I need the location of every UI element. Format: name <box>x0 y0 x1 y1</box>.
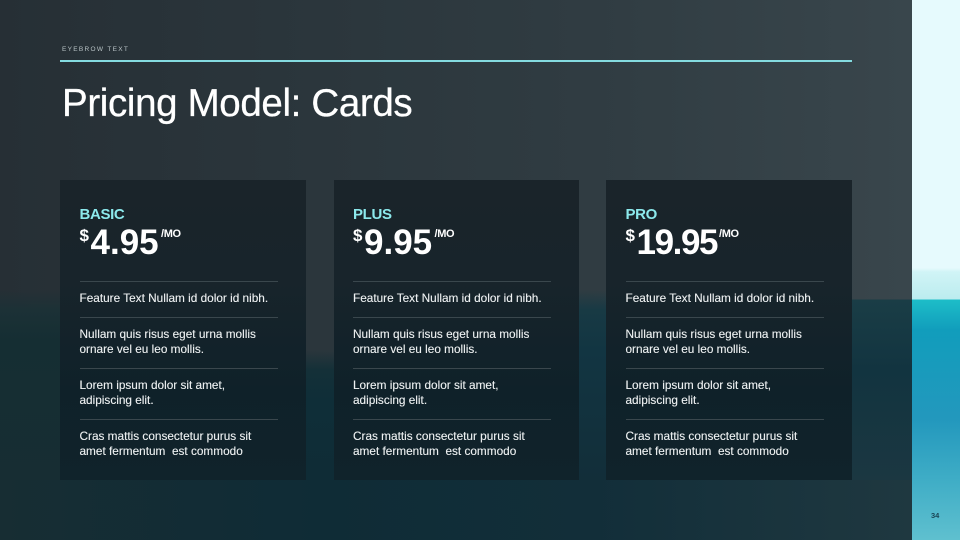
feature 4: Cras mattis consectetur purus sit <box>353 429 525 443</box>
left gutter water <box>0 280 60 480</box>
feature 4: amet fermentum est commodo <box>626 444 789 458</box>
feature 4: Cras mattis consectetur purus sit <box>626 429 797 443</box>
price: 9.95 <box>364 223 432 262</box>
panel: basic card <box>60 180 306 480</box>
title: Pricing Model: Cards <box>62 82 412 125</box>
price: $ <box>353 226 362 245</box>
feature 3 <box>80 378 225 407</box>
feature 2: ornare vel eu leo mollis. <box>626 342 750 356</box>
feature 4: amet fermentum est commodo <box>80 444 243 458</box>
feature 2: ornare vel eu leo mollis. <box>353 342 478 356</box>
feature 3 <box>353 378 499 407</box>
feature 1: Feature Text Nullam id dolor id nibh. <box>626 291 814 305</box>
feature 4: Cras mattis consectetur purus sit <box>80 429 251 443</box>
gutter water 4 <box>852 280 912 480</box>
feature 1: Feature Text Nullam id dolor id nibh. <box>80 291 268 305</box>
eyebrow text: EYEBROW TEXT <box>62 46 129 53</box>
feature 4 <box>626 429 798 458</box>
feature 4 <box>80 429 252 458</box>
plan name: PLUS <box>353 206 392 223</box>
side strip <box>912 0 960 540</box>
price: 19.95 <box>636 223 717 262</box>
feature 2: Nullam quis risus eget urna mollis <box>80 327 256 341</box>
feature 4 <box>353 429 525 458</box>
page number: 34 <box>931 511 939 520</box>
feature 3: adipiscing elit. <box>80 393 154 407</box>
price: $ <box>626 226 635 245</box>
feature 3: adipiscing elit. <box>626 393 700 407</box>
feature 3: Lorem ipsum dolor sit amet, <box>80 378 225 392</box>
feature 3 <box>626 378 771 407</box>
panel: plus card <box>334 180 578 480</box>
feature 2 <box>353 327 529 356</box>
feature 2 <box>626 327 802 356</box>
feature 2: ornare vel eu leo mollis. <box>80 342 204 356</box>
header rule <box>60 60 852 62</box>
price: $ <box>80 226 89 245</box>
gutter water 2 <box>306 280 334 480</box>
feature 2 <box>80 327 256 356</box>
feature 2: Nullam quis risus eget urna mollis <box>353 327 529 341</box>
feature 3: Lorem ipsum dolor sit amet, <box>353 378 499 392</box>
gutter water 3 <box>578 280 606 480</box>
plan name: BASIC <box>80 206 124 223</box>
plan name: PRO <box>626 206 657 223</box>
panel: pro card <box>606 180 852 480</box>
per month label: /MO <box>161 228 181 240</box>
feature 4: amet fermentum est commodo <box>353 444 516 458</box>
per month label: /MO <box>434 228 454 240</box>
per month label: /MO <box>719 228 739 240</box>
price: 4.95 <box>90 223 159 262</box>
feature 1: Feature Text Nullam id dolor id nibh. <box>353 291 542 305</box>
feature 2: Nullam quis risus eget urna mollis <box>626 327 802 341</box>
background lower band <box>0 480 912 540</box>
feature 3: Lorem ipsum dolor sit amet, <box>626 378 771 392</box>
feature 3: adipiscing elit. <box>353 393 427 407</box>
